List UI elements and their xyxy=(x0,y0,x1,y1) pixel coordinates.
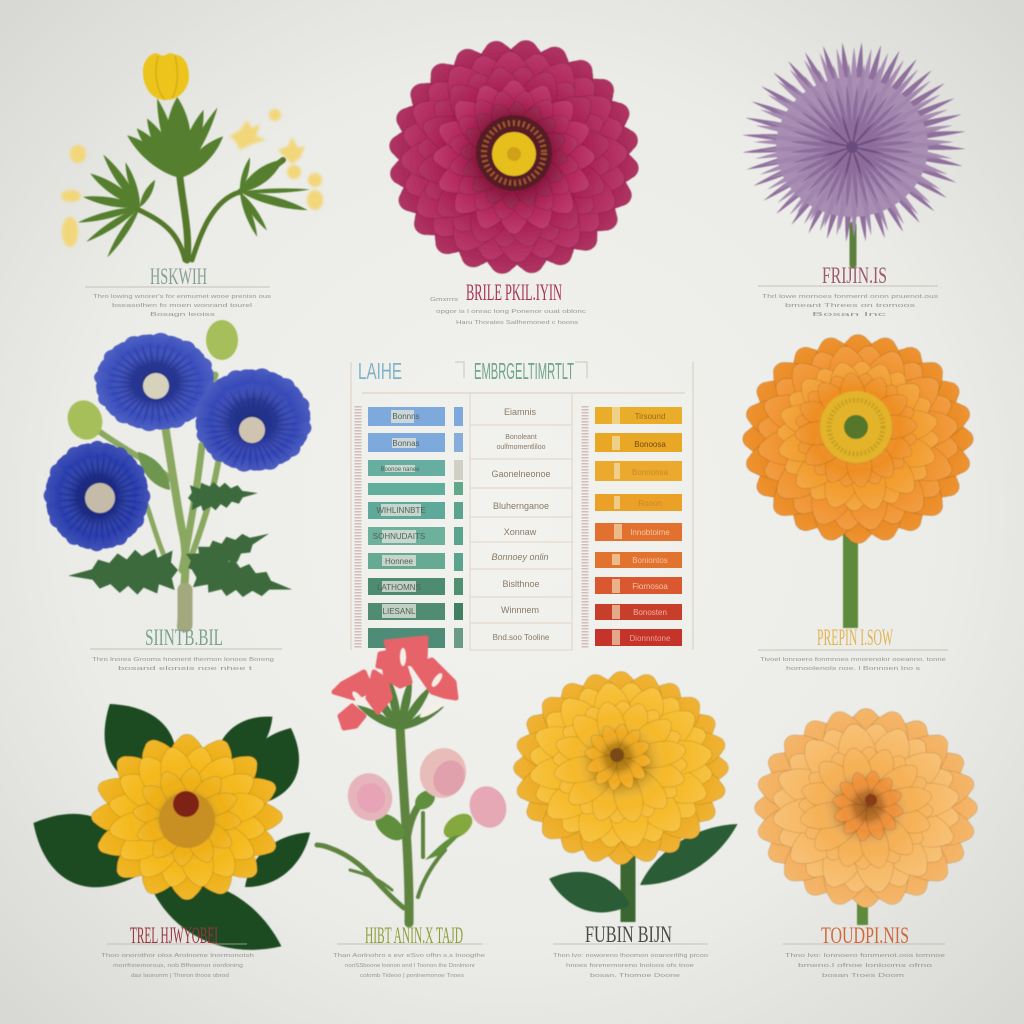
body text: Thro lowing wnorer's for enmumet wooe prenisn ous xyxy=(93,294,271,300)
caption: bottom 1: TREL HJWYOBEI xyxy=(130,923,218,948)
right bars: Fiornosoa xyxy=(632,582,668,591)
right bars: Ronon xyxy=(638,499,662,508)
column headers: LAIHE xyxy=(358,358,402,384)
body text: Thro lnores Grooms hnonent thermon lonoos Boreng xyxy=(92,657,274,663)
body text: bosan Troes Doom xyxy=(822,973,905,979)
left bars: Boonoe nanee xyxy=(380,467,420,473)
leaves xyxy=(77,97,310,259)
centre cells: Bonnoey onlin xyxy=(491,552,549,562)
caption: bottom 2: HIBT ANIN.X TAJD xyxy=(365,923,463,948)
centre cells xyxy=(470,393,572,650)
caption: top left xyxy=(85,264,271,318)
centre cells: Bnd.soo Tooline xyxy=(493,633,550,642)
centre cells: Winnnem xyxy=(501,605,539,615)
body text: noriSSboone loonon ond l Toonon the Donlmonr xyxy=(345,963,475,969)
petals xyxy=(52,700,322,934)
caption: top centre xyxy=(430,280,586,326)
body text: homoolenols noe. l Bonnoen Ino s xyxy=(786,666,920,672)
centre cells: Eiamnis xyxy=(504,407,537,417)
right bars: Bonnonsa xyxy=(632,468,669,477)
flower: magenta dahlia xyxy=(284,0,744,373)
body text: Tivoel lonnoero fonmnoes mnorenolor ooeanno. tonne xyxy=(760,657,946,663)
right bars: Tirsound xyxy=(635,412,665,421)
left bars: LIESANL xyxy=(383,607,416,616)
flower: yellow bloom with dark leaves xyxy=(17,685,322,971)
centre cells: Xonnaw xyxy=(504,527,537,537)
right bars: Bonoosa xyxy=(634,440,666,449)
body text: opgor is l onrac long Ponenor ouat oblonc xyxy=(436,309,586,315)
flower: pink cluster with buds xyxy=(317,638,512,923)
frame xyxy=(351,362,693,650)
body text: Thoo onorothor olos Arolnome lnormonotsh xyxy=(101,953,254,959)
body text: Bosan Inc xyxy=(812,312,887,318)
centre cells: Bluhernganoe xyxy=(493,501,549,511)
title: PREPIN I.SOW xyxy=(817,625,893,650)
blue blooms xyxy=(15,306,347,587)
body text xyxy=(430,297,586,326)
body text xyxy=(785,953,945,979)
flower: yellow bud with side blossoms xyxy=(61,53,323,260)
body text: Haru Thorates Sallhemoned c hoons xyxy=(456,320,578,326)
pink buds xyxy=(371,787,477,860)
caption: middle right xyxy=(758,625,948,672)
stem xyxy=(843,530,858,628)
body text: bseasolhen fo moen wonrand tourel xyxy=(112,303,252,309)
yellow bud xyxy=(143,53,189,100)
cluster sepals xyxy=(355,675,446,734)
caption: bottom 1 xyxy=(101,923,254,979)
stem and branches xyxy=(317,725,445,923)
flower: golden chrysanthemum xyxy=(441,607,801,929)
stem xyxy=(850,225,856,265)
body text xyxy=(762,294,938,318)
right bars xyxy=(595,407,682,646)
green buds xyxy=(62,320,238,445)
title: FRIJIN.IS xyxy=(822,263,887,288)
petals xyxy=(680,642,1024,974)
petals xyxy=(645,0,1024,329)
left bars: WIHLINNBTE xyxy=(376,506,426,515)
caption: middle left xyxy=(90,625,282,672)
body text: Gmxrrrs xyxy=(430,297,458,303)
flower: peach chrysanthemum xyxy=(680,642,1024,974)
body text xyxy=(92,657,274,672)
table panel: EMBRGELTIMRTLT xyxy=(474,358,574,384)
body text: colomb Tideoo | ponlnemonoe Tnoes xyxy=(360,973,464,979)
caption: bottom 4 xyxy=(783,923,945,979)
flower: purple spiky aster xyxy=(645,0,1024,329)
side blossoms xyxy=(61,109,323,247)
body text xyxy=(333,953,485,979)
body text: bosand elonsis noe nhee t xyxy=(118,666,253,672)
table panel xyxy=(351,358,693,650)
body text: bmeant Threes on tromoos xyxy=(785,303,915,309)
right bars: Innobtoime xyxy=(630,528,670,537)
stem xyxy=(857,890,868,925)
left bars: SOHNUDAITS xyxy=(373,532,425,541)
right bars: Bonosten xyxy=(633,608,667,617)
caption: bottom 3 xyxy=(553,922,708,979)
body text xyxy=(760,657,946,672)
petals xyxy=(665,264,1024,614)
left bars: Honnee xyxy=(385,557,414,566)
flower: blue cornflowers xyxy=(15,306,347,627)
column headers xyxy=(358,358,574,384)
caption: bottom 2 xyxy=(333,923,485,979)
body text: bosan. Thomoe Doone xyxy=(590,973,680,979)
serrated leaves xyxy=(67,446,296,608)
body text: Thon lvo: noworeno lhoomon ooanorrlihg prcoo xyxy=(553,953,708,959)
centre cells: Bislthnoe xyxy=(502,579,540,589)
body text xyxy=(553,953,708,979)
leaves xyxy=(17,685,320,971)
body text: das Iaononm | Thoron thoos obrod xyxy=(131,973,229,979)
right bars: Boniontos xyxy=(632,556,668,565)
title: TOUDPI.NIS xyxy=(821,923,909,948)
dotted side strips xyxy=(358,406,585,648)
coral blossoms xyxy=(334,638,456,728)
stems xyxy=(100,375,220,627)
left bars xyxy=(368,407,463,648)
left bars: LATHOMNS xyxy=(377,583,421,592)
body text xyxy=(101,953,254,979)
petals xyxy=(441,607,801,929)
body text: morrfnoemorous, nob Bfhoemor oonfoning xyxy=(113,963,243,969)
left bars: Bonnas xyxy=(392,439,420,448)
centre cells: Bonoleant xyxy=(505,434,537,441)
body text: Bosagn leoiss xyxy=(150,312,215,318)
body text: Thrl lowe mornoes fonmernt onon pnuenot.ous xyxy=(762,294,938,300)
body text: hnoes fonmemoreno lnoloos ofs tnoe xyxy=(566,963,694,969)
centre cells: Gaonelneonoe xyxy=(491,469,551,479)
caption: top right xyxy=(758,263,938,318)
title: BRILE PKIL.IYIN xyxy=(466,280,562,305)
body text: Thno lvo: lonnoero fonmenot.oos tomnoe xyxy=(785,953,945,959)
title: SIINTB.BIL xyxy=(145,625,223,650)
centre cells: oulfmomentliloo xyxy=(496,444,546,451)
left bars: Bonnns xyxy=(392,412,420,421)
title: HSKWIH xyxy=(150,264,207,289)
stem and leaves xyxy=(620,850,636,922)
body text: bmeno.l ofnoe lonlooms ofrno xyxy=(798,963,932,969)
right bars: Dionnntone xyxy=(630,634,671,643)
body text: Than Aorlnohro s evr eSvo ofhn s.s Inoogthe xyxy=(333,953,485,959)
flower: orange gerbera xyxy=(665,264,1024,628)
body text xyxy=(93,294,271,318)
title: FUBIN BIJN xyxy=(585,922,672,947)
stems xyxy=(135,160,283,260)
